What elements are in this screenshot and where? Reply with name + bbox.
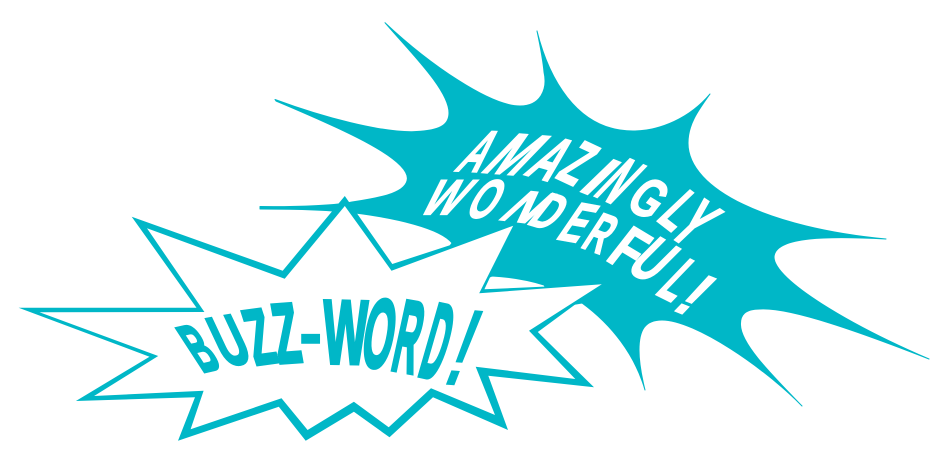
text: AMAZINGLY WONDERFUL! [409,119,736,327]
text: AMAZINGLY WONDERFUL!: W [409,170,486,226]
text: AMAZINGLY WONDERFUL!: R [572,202,629,266]
text: AMAZINGLY WONDERFUL!: D [517,183,581,241]
text: AMAZINGLY WONDERFUL!: I [567,149,634,206]
text: BUZZ-WORD!: W [322,282,369,384]
text line: WONDERFUL! [409,168,731,327]
text: AMAZINGLY WONDERFUL!: L [645,179,715,243]
text line: AMAZINGLY [444,119,736,260]
text: BUZZ-WORD!: B [165,311,233,387]
text: BUZZ-WORD!: Z [233,293,286,382]
text: BUZZ-WORD! [165,279,498,410]
text: BUZZ-WORD!: - [300,300,321,369]
text: BUZZ-WORD!: O [355,279,404,390]
text: AMAZINGLY WONDERFUL!: Y [654,188,736,260]
text: BUZZ-WORD!: R [385,280,433,396]
text: BUZZ-WORD!: U [197,301,262,382]
text: AMAZINGLY WONDERFUL!: L [643,247,717,314]
text: AMAZINGLY WONDERFUL!: M [467,122,565,188]
text: BUZZ-WORD!: Z [265,286,307,382]
text: AMAZINGLY WONDERFUL!: E [547,192,610,255]
text: AMAZINGLY WONDERFUL!: O [456,168,518,232]
text: AMAZINGLY WONDERFUL!: A [512,125,591,194]
text: AMAZINGLY WONDERFUL!: U [614,226,693,295]
text: BUZZ-WORD!: ! [431,287,498,410]
text: AMAZINGLY WONDERFUL!: N [486,183,569,233]
text: BUZZ-WORD!: D [410,282,466,403]
burst: solid teal splat [260,23,929,406]
text: AMAZINGLY WONDERFUL!: F [596,215,663,285]
text: AMAZINGLY WONDERFUL!: G [616,165,682,232]
burst: outlined white star [19,196,603,441]
text: AMAZINGLY WONDERFUL!: A [444,119,515,185]
text: AMAZINGLY WONDERFUL!: Z [545,129,611,199]
text: AMAZINGLY WONDERFUL!: ! [660,264,731,327]
text: AMAZINGLY WONDERFUL!: N [581,147,660,217]
